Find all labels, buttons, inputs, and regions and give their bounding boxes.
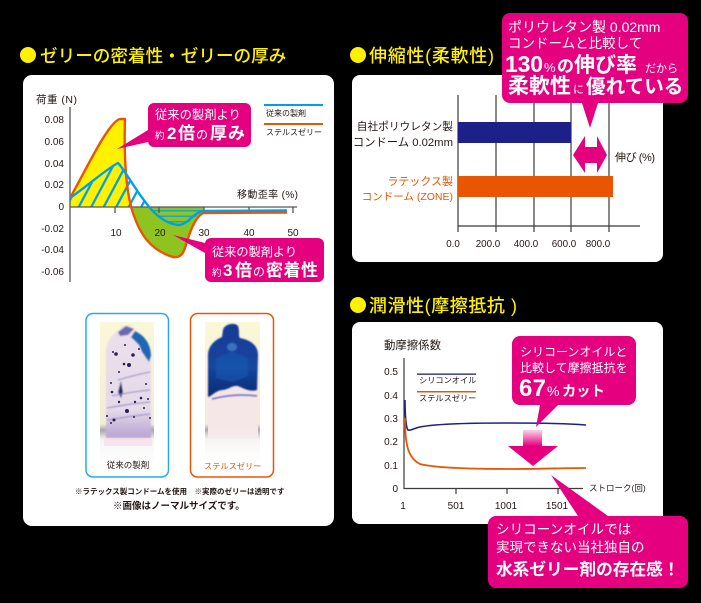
callout: three times the adhesion: 従来の製剤より (212, 245, 297, 259)
legend (264, 104, 323, 137)
bar label: polyurethane: 自社ポリウレタン製 (357, 120, 453, 133)
y axis labels (41, 115, 64, 278)
callout: 130 percent elongation: ポリウレタン製 0.02mm (508, 19, 660, 35)
x axis title: ストローク(回) (589, 483, 646, 493)
y axis labels: 0.3 (384, 414, 398, 425)
photo card: conventional jelly (86, 314, 168, 477)
arrow: friction reduction (508, 430, 558, 466)
callout: 130 percent elongation: の (557, 57, 574, 76)
callout: three times the adhesion: の (253, 265, 265, 279)
x axis labels (110, 228, 299, 239)
callout: twice the thickness (117, 103, 251, 149)
green adhesion area (131, 207, 204, 257)
y axis labels: 0.2 (384, 437, 398, 448)
x axis labels: 20 (154, 228, 166, 239)
callout: three times the adhesion: 約 (212, 267, 222, 279)
hatched conventional area above zero (70, 163, 150, 207)
x axis labels: 40 (243, 228, 255, 239)
legend (417, 374, 476, 403)
blue curve: conventional jelly (70, 163, 287, 225)
x axis labels: 30 (198, 228, 210, 239)
callout: three times the adhesion (173, 235, 324, 282)
footnote: ※ラテックス製コンドームを使用 ※実際のゼリーは透明です (75, 486, 285, 496)
line chart: load versus strain (36, 93, 323, 282)
y axis labels: 0 (392, 484, 398, 495)
striped conventional area below zero (150, 207, 204, 225)
callout: water-based jelly presence: 実現できない当社独自の (496, 540, 644, 555)
callout: 67 percent cut: 67 (519, 375, 546, 402)
bar label: latex (362, 174, 453, 203)
callout: 130 percent elongation: コンドームと比較して (508, 36, 642, 51)
panel: adhesion and thickness (23, 75, 334, 526)
legend: 従来の製剤 (266, 108, 306, 118)
x axis labels: 200.0 (476, 239, 501, 250)
callout: 130 percent elongation: 伸び率 (574, 54, 637, 77)
callout: 130 percent elongation: 柔軟性 (508, 75, 571, 98)
note: normal size image: ※画像はノーマルサイズです。 (113, 500, 245, 512)
bar: polyurethane (458, 122, 571, 143)
photo: condom coated with stealth jelly (205, 322, 260, 472)
callout: 67 percent cut (512, 336, 636, 427)
x axis labels: 400.0 (514, 239, 539, 250)
orange curve: stealth jelly (70, 119, 287, 257)
bar chart: elongation (353, 95, 655, 250)
callout: twice the thickness: 従来の製剤より (155, 108, 241, 122)
callout: water-based jelly presence: シリコーンオイルでは (496, 522, 631, 537)
y axis labels: -0.06 (41, 267, 64, 278)
photo caption: 従来の製剤 (107, 460, 149, 470)
y axis labels: -0.04 (41, 245, 64, 256)
arrow: difference in elongation (573, 136, 607, 173)
callout: twice the thickness: 厚み (210, 124, 245, 143)
y axis labels: -0.02 (41, 224, 64, 235)
x axis labels (446, 239, 611, 250)
y axis labels: 0.08 (45, 115, 64, 126)
y axis title: 荷重 (N) (36, 93, 77, 106)
y axis labels: 0.02 (45, 180, 64, 191)
callout: water-based jelly presence: 水系ゼリー剤の存在感！ (496, 559, 680, 579)
photo caption: ステルスゼリー (204, 461, 261, 471)
y axis labels: 0.1 (384, 461, 398, 472)
y axis labels: 0.04 (45, 159, 64, 170)
axes (404, 358, 583, 494)
callout: 130 percent elongation: に (573, 84, 584, 96)
x axis labels: 10 (110, 228, 122, 239)
x axis labels: 501 (448, 501, 465, 512)
callout: twice the thickness: の (196, 128, 208, 142)
callout: 67 percent cut: 比較して摩擦抵抗を (520, 360, 628, 375)
heading: lubricity: 潤滑性(摩擦抵抗 ) (369, 296, 517, 316)
panel: elasticity (352, 75, 663, 262)
y axis labels: 0.06 (45, 137, 64, 148)
y axis title: 動摩擦係数 (384, 338, 442, 352)
callout: 67 percent cut: % (547, 383, 559, 399)
legend: シリコンオイル (419, 376, 476, 385)
yellow thickness area (70, 119, 131, 207)
x axis labels: 1001 (495, 501, 518, 512)
bar label: polyurethane (353, 120, 453, 149)
heading: jelly adhesion and thickness: ゼリーの密着性・ゼリーの厚み (40, 46, 286, 66)
photo card: stealth jelly (190, 314, 274, 477)
callout: 130 percent elongation: % (544, 60, 556, 75)
callout: 130 percent elongation: だから (645, 62, 678, 75)
y axis labels: 0 (58, 202, 64, 213)
blue curve: silicone oil (405, 400, 586, 430)
callout: water-based jelly presence (488, 475, 688, 588)
callout: 130 percent elongation: 優れている (586, 76, 683, 98)
bar label: latex: ラテックス製 (387, 174, 453, 188)
x axis labels (400, 501, 569, 512)
callout: 130 percent elongation (502, 13, 688, 128)
x axis labels: 800.0 (586, 239, 611, 250)
y axis labels: 0.4 (384, 391, 398, 402)
x axis labels: 0.0 (446, 239, 460, 250)
x axis labels: 1 (400, 501, 406, 512)
x axis labels: 50 (287, 228, 299, 239)
grid lines (458, 95, 640, 232)
callout: 130 percent elongation: 130 (505, 51, 543, 77)
legend: ステルスゼリー (266, 127, 322, 137)
bar: latex (458, 176, 613, 197)
y axis labels (384, 367, 398, 495)
panel: lubricity (352, 322, 663, 524)
callout: three times the adhesion: 密着性 (266, 260, 318, 280)
axis unit: 伸び (%) (615, 151, 655, 164)
callout: 67 percent cut: シリコーンオイルと (520, 345, 627, 359)
line chart: friction coefficient (384, 338, 646, 512)
heading: elasticity: 伸縮性(柔軟性) (369, 46, 494, 66)
axes (70, 107, 297, 282)
x axis labels: 1501 (546, 501, 569, 512)
y axis labels: 0.5 (384, 367, 398, 378)
orange curve: stealth jelly (405, 418, 586, 469)
legend: ステルスゼリー (419, 393, 476, 403)
callout: three times the adhesion: 3倍 (223, 261, 252, 280)
x axis labels: 600.0 (552, 239, 577, 250)
bar label: latex: コンドーム (ZONE) (362, 191, 453, 203)
x axis title: 移動歪率 (%) (237, 188, 298, 201)
photo: condom with patchy conventional jelly (100, 322, 154, 472)
callout: 67 percent cut: カット (562, 383, 605, 400)
callout: twice the thickness: 約 (155, 130, 165, 142)
bar label: polyurethane: コンドーム 0.02mm (353, 136, 453, 149)
callout: twice the thickness: 2倍 (167, 124, 195, 143)
